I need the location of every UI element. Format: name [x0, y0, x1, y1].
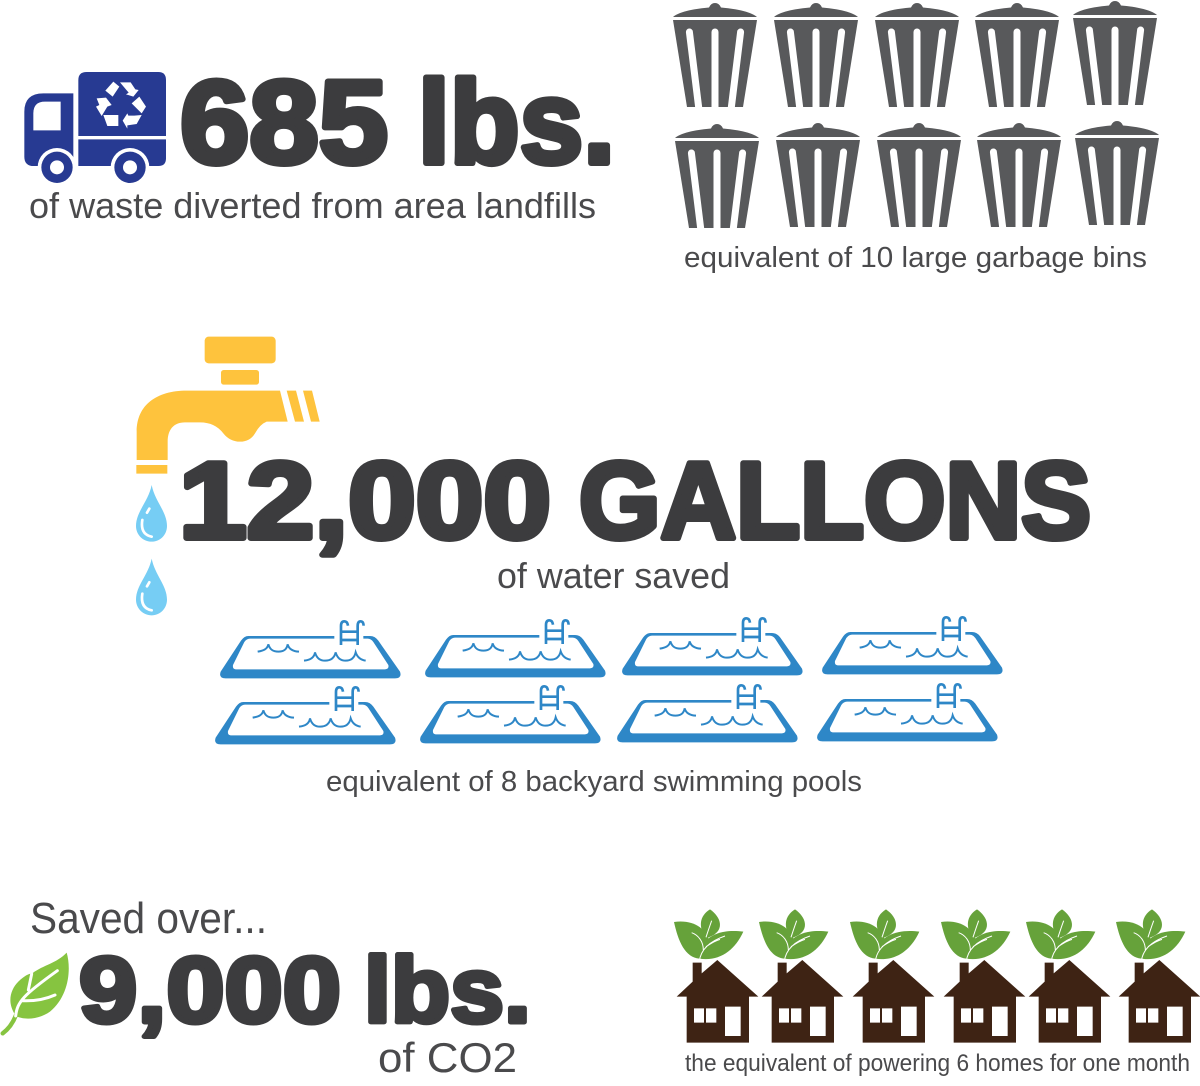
- heading: 12,000 gallons: [179, 440, 1091, 562]
- text: of CO2: of CO2: [378, 1034, 517, 1081]
- heading: 685 lbs.: [180, 57, 615, 189]
- heading: 685 lbs.: lbs.: [418, 57, 615, 189]
- panel: homes powered: [674, 909, 1200, 1077]
- panel: water saved: [136, 337, 1091, 798]
- icon: recycling truck: [24, 72, 166, 187]
- text: of water saved: of water saved: [497, 555, 730, 596]
- icon: ten garbage bins: [673, 1, 1159, 231]
- panel: CO2 saved: [3, 894, 531, 1081]
- icon: eight swimming pools: [215, 617, 1003, 744]
- heading: 685 lbs.: 685: [180, 57, 388, 189]
- icon: faucet with drops: [136, 337, 320, 615]
- heading: 12,000 gallons: GALLONS: [579, 440, 1091, 562]
- heading: 9,000 lbs.: 9,000: [79, 938, 341, 1042]
- heading: 12,000 gallons: 12,000: [179, 440, 551, 562]
- text: bins caption: equivalent of 10 large garbage bins: [684, 242, 1147, 274]
- text: pools caption: equivalent of 8 backyard swimming pools: [326, 766, 862, 798]
- icon: six houses with leaves: [674, 909, 1200, 1043]
- panel: garbage bin equivalents: [673, 1, 1159, 274]
- icon: green leaf: [3, 953, 69, 1033]
- text: of waste diverted: of waste diverted from area landfills: [29, 185, 596, 226]
- heading: 9,000 lbs.: [79, 938, 531, 1042]
- text: saved over: Saved over...: [30, 894, 267, 943]
- heading: 9,000 lbs.: lbs.: [364, 938, 531, 1042]
- panel: waste diverted: [24, 57, 615, 226]
